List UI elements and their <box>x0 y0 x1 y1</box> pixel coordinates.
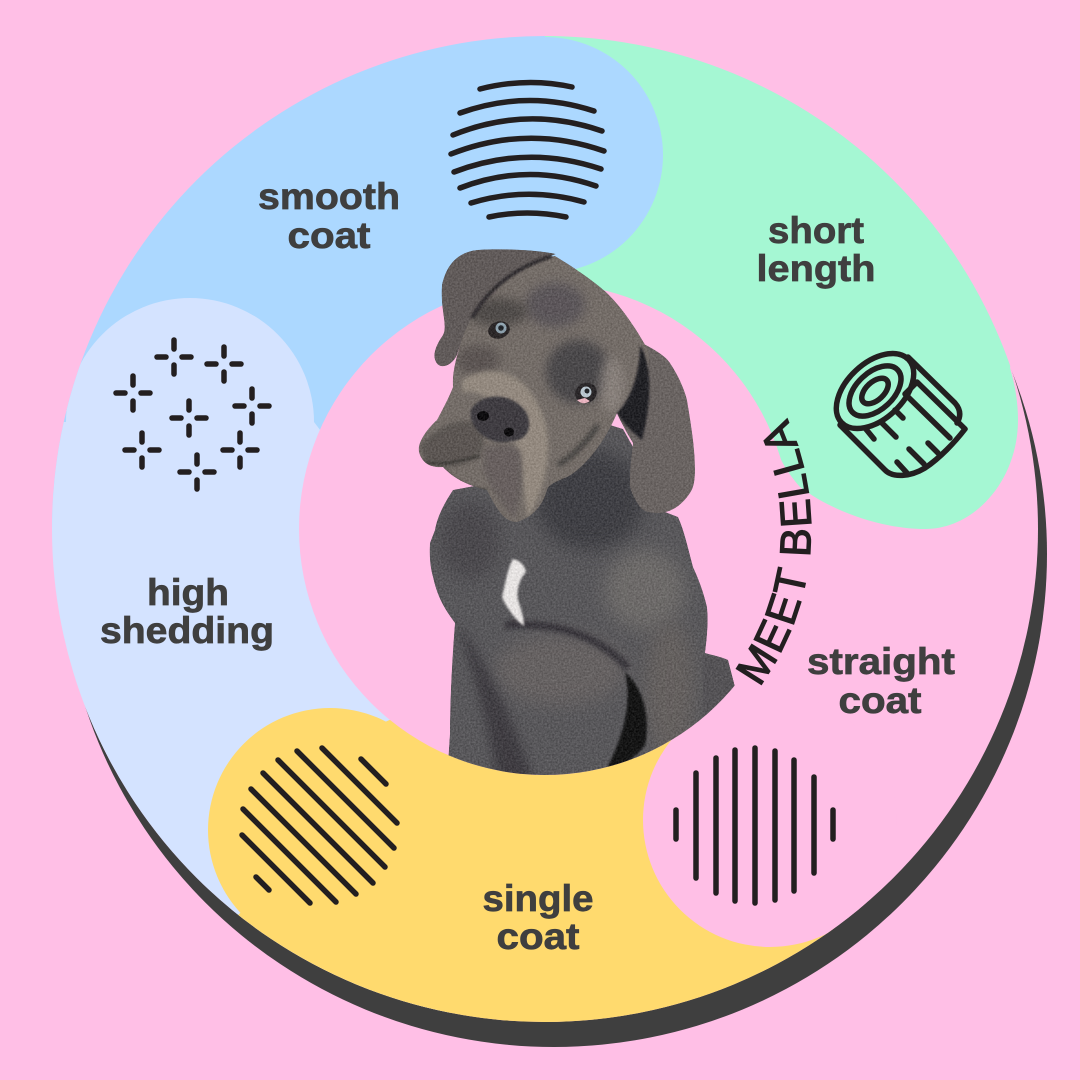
right ear <box>617 342 695 513</box>
icon: smooth coat lines <box>451 82 604 217</box>
panel: smooth coat <box>52 36 663 524</box>
label: short length <box>756 210 876 289</box>
label: single coat: single <box>482 878 594 919</box>
dog body <box>430 425 734 775</box>
panel: straight coat <box>643 718 866 947</box>
label: smooth coat <box>258 176 400 256</box>
label: single coat: coat <box>496 916 580 957</box>
ear fold <box>472 256 552 318</box>
icon: single coat diagonal lines <box>242 748 397 903</box>
label: high shedding <box>100 572 274 651</box>
label: straight coat <box>807 641 955 721</box>
label: straight coat: coat <box>838 680 922 721</box>
label: short length: length <box>756 248 876 289</box>
label: smooth coat: coat <box>288 215 370 256</box>
label: smooth coat: smooth <box>258 176 400 217</box>
label: single coat <box>482 878 594 957</box>
label: straight coat: straight <box>807 641 955 682</box>
left ear <box>434 249 556 366</box>
dog photo illustration <box>419 249 750 790</box>
head shading <box>420 283 624 518</box>
nose <box>470 396 529 442</box>
icon: tape measure <box>822 339 965 475</box>
right eye <box>575 382 597 404</box>
centre circle <box>299 283 791 775</box>
white chest patch <box>502 559 526 626</box>
icon: straight coat vertical lines <box>676 748 833 903</box>
label: short length: short <box>768 210 864 251</box>
label: high shedding: shedding <box>100 610 274 651</box>
icon: shedding sparkles <box>116 340 269 489</box>
left eye <box>488 321 510 339</box>
panel: high shedding <box>52 298 450 1013</box>
curved title: meet bella: MEET BELLA <box>736 418 812 686</box>
panel: single coat <box>208 708 834 1022</box>
head <box>419 256 649 522</box>
label: high shedding: high <box>147 572 229 613</box>
panel: short length <box>545 36 1018 529</box>
ear inner shadow <box>617 345 649 440</box>
